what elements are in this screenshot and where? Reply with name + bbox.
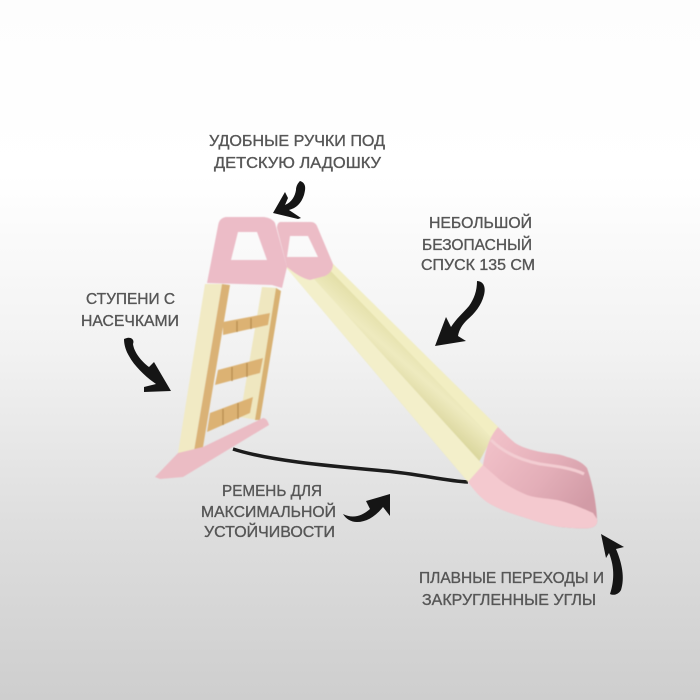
back handle	[277, 222, 333, 280]
label: handles	[209, 133, 385, 172]
arrow: slope	[435, 281, 485, 346]
label: transitions	[419, 570, 604, 609]
label: steps: СТУПЕНИ С	[86, 291, 175, 308]
label: steps	[81, 291, 179, 330]
label: steps: НАСЕЧКАМИ	[81, 313, 179, 330]
strap	[233, 449, 468, 482]
label: transitions: ЗАКРУГЛЕННЫЕ УГЛЫ	[422, 592, 596, 609]
ladder right rail	[240, 287, 281, 420]
slide chute	[285, 262, 498, 482]
slide illustration	[155, 217, 597, 528]
label: slope: НЕБОЛЬШОЙ	[429, 213, 532, 232]
label: strap: УСТОЙЧИВОСТИ	[204, 522, 335, 541]
label: handles: ДЕТСКУЮ ЛАДОШКУ	[214, 155, 382, 172]
ladder rungs	[207, 313, 270, 432]
label: strap	[201, 483, 336, 541]
label: handles: УДОБНЫЕ РУЧКИ ПОД	[209, 133, 385, 150]
label: slope: СПУСК 135 СМ	[421, 257, 535, 274]
slide pink end	[468, 427, 597, 528]
arrow: transitions	[601, 534, 624, 595]
arrow: handles	[273, 181, 305, 219]
label: slope	[421, 213, 535, 274]
front handle	[207, 217, 287, 288]
label: transitions: ПЛАВНЫЕ ПЕРЕХОДЫ И	[419, 570, 604, 587]
label: strap: РЕМЕНЬ ДЛЯ	[222, 483, 322, 500]
arrow: strap	[343, 494, 390, 522]
label: strap: МАКСИМАЛЬНОЙ	[201, 502, 336, 521]
ladder left rail	[178, 284, 230, 457]
base foot	[155, 418, 269, 479]
arrow: steps	[124, 338, 171, 392]
label: slope: БЕЗОПАСНЫЙ	[422, 235, 532, 254]
